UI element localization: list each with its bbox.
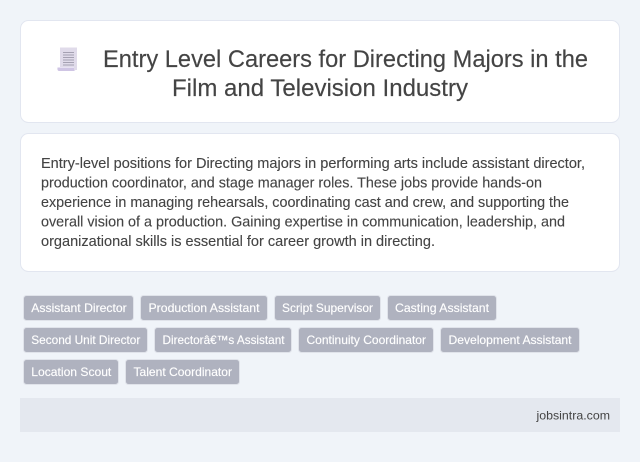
footer bar xyxy=(20,398,620,432)
tag: Casting Assistant: Casting Assistant xyxy=(395,301,490,315)
tag: Casting Assistant xyxy=(388,296,496,320)
tag: Development Assistant xyxy=(440,328,580,352)
tag: Talent Coordinator xyxy=(126,360,240,384)
panel: title card xyxy=(20,20,620,122)
icon: script document xyxy=(57,48,77,71)
tag: Development Assistant: Development Assistant xyxy=(448,333,572,347)
tag: Assistant Director xyxy=(24,296,134,320)
title text xyxy=(103,46,588,102)
tag: Production Assistant: Production Assistant xyxy=(148,301,260,315)
tag: Production Assistant xyxy=(140,296,268,320)
tag: Talent Coordinator: Talent Coordinator xyxy=(134,365,232,379)
tag: Second Unit Director xyxy=(24,328,148,352)
tag: Director's Assistant xyxy=(154,328,292,352)
footer text: jobsintra.com: jobsintra.com xyxy=(535,408,610,422)
title text: Entry Level Careers for Directing Majors in the xyxy=(103,46,588,73)
description text: organizational skills is essential for career growth in directing. xyxy=(41,234,435,250)
tag: Continuity Coordinator xyxy=(298,328,434,352)
tag: Script Supervisor: Script Supervisor xyxy=(282,301,373,315)
panel: description xyxy=(20,134,620,272)
career tags xyxy=(24,296,580,384)
tag: Location Scout: Location Scout xyxy=(31,365,112,379)
description text: experience in managing rehearsals, coordinating cast and crew, and supporting the xyxy=(41,195,569,211)
description text: production coordinator, and stage manager roles. These jobs provide hands-on xyxy=(41,176,542,192)
description text: Entry-level positions for Directing majors in performing arts include assistant director, xyxy=(41,156,585,172)
title text: Film and Television Industry xyxy=(172,75,468,102)
tag: Continuity Coordinator: Continuity Coordinator xyxy=(306,333,426,347)
description text: overall vision of a production. Gaining expertise in communication, leadership, and xyxy=(41,214,565,230)
tag: Director's Assistant: Directorâ€™s Assistant xyxy=(162,333,285,347)
tag: Location Scout xyxy=(24,360,118,384)
tag: Assistant Director: Assistant Director xyxy=(31,301,127,315)
tag: Script Supervisor xyxy=(274,296,380,320)
tag: Second Unit Director: Second Unit Director xyxy=(31,333,140,347)
description text xyxy=(41,156,585,250)
